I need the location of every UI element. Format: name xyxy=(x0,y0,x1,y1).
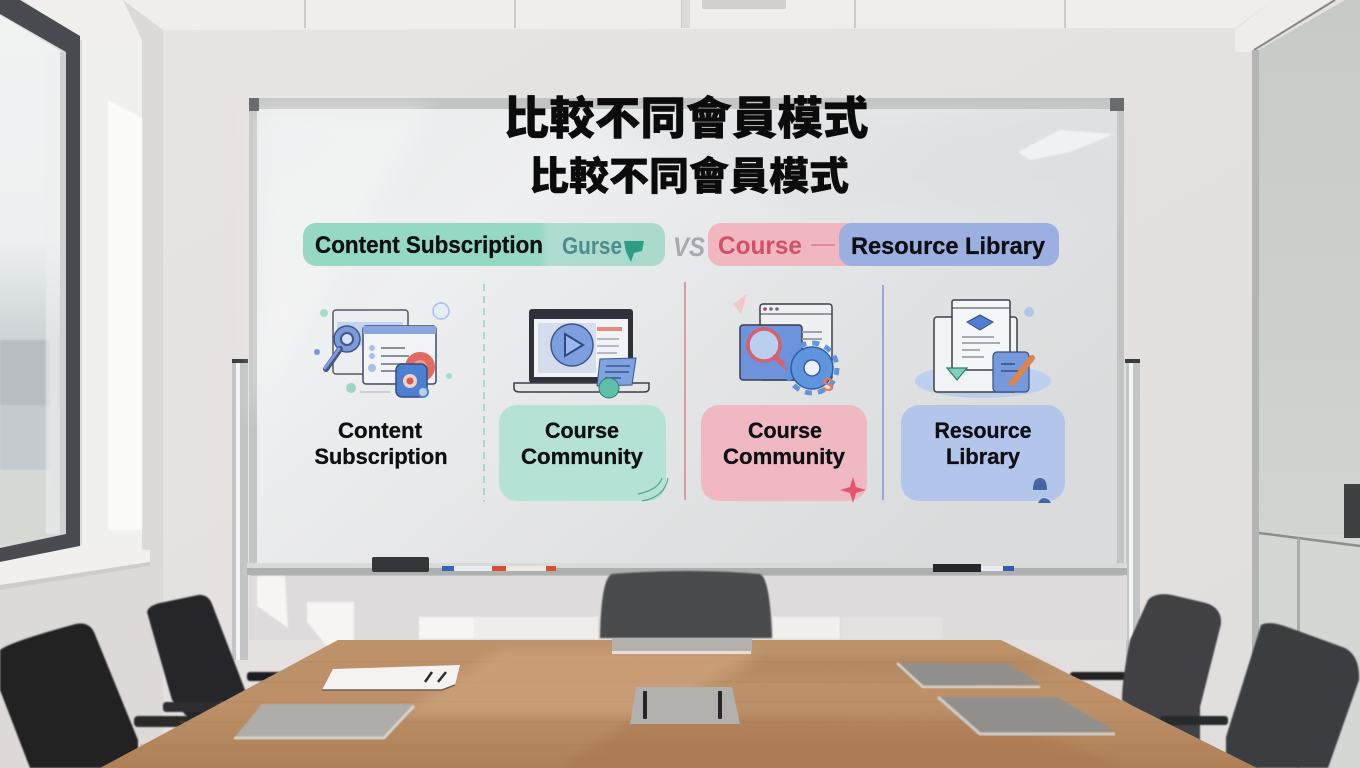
icon: green play tag xyxy=(624,241,644,262)
header bar: mint pill xyxy=(303,223,665,266)
icon: small blue cluster xyxy=(1033,478,1051,503)
card: resource library: Resource xyxy=(934,418,1032,443)
ceiling xyxy=(123,0,1273,30)
whiteboard frame and surface xyxy=(247,98,1127,576)
chair: left rear xyxy=(147,595,301,720)
header label: content subscription: Content Subscription xyxy=(315,232,543,259)
icon: documents and pen xyxy=(915,300,1051,398)
icon: magnifier and gear: S xyxy=(822,375,834,395)
icon: browser windows with magnifier xyxy=(314,303,452,397)
panel: content subscription xyxy=(314,303,452,469)
icon: sparkle xyxy=(840,477,866,503)
panel: course community mint xyxy=(499,309,668,501)
card: resource library xyxy=(901,405,1065,503)
laptop: left front xyxy=(234,704,414,738)
tablet with pens center xyxy=(630,687,740,724)
card: course community pink xyxy=(701,405,867,503)
chair: right front xyxy=(1160,623,1359,768)
chair: back center xyxy=(600,571,772,638)
right wall and glass partition xyxy=(1235,0,1360,768)
header label: faded course: Gurse xyxy=(562,233,622,260)
subtitle: 比較不同會員模式 xyxy=(529,156,849,199)
icon: laptop with play button xyxy=(514,309,649,398)
panel: resource library xyxy=(901,300,1065,503)
label: content subscription: Content xyxy=(338,418,422,443)
laptop: center back xyxy=(612,638,752,654)
icon: magnifier and gear xyxy=(733,294,837,395)
divider blue xyxy=(882,285,884,500)
card: course community mint xyxy=(499,405,668,501)
laptop: right front xyxy=(938,697,1115,734)
card: course community mint: Course xyxy=(545,418,619,443)
card: course community pink: Community xyxy=(723,444,845,469)
divider pink xyxy=(684,282,686,500)
main title: 比較不同會員模式 xyxy=(504,93,868,144)
left wall and window xyxy=(0,0,163,768)
vs mark: VS xyxy=(673,232,705,262)
header label: resource library: Resource Library xyxy=(851,233,1046,260)
header bar: blue pill xyxy=(839,223,1059,266)
sunlight patches under board xyxy=(257,576,942,650)
card: course community pink: Course xyxy=(748,418,822,443)
title block xyxy=(504,93,868,199)
label: content subscription xyxy=(314,418,448,469)
label: content subscription: Subscription xyxy=(314,444,448,469)
table xyxy=(100,640,1257,768)
header label: course: Course xyxy=(718,232,802,260)
card: course community mint: Community xyxy=(521,444,643,469)
card: resource library: Library xyxy=(946,444,1020,469)
wall shading under board xyxy=(249,576,1127,640)
panel: course community pink xyxy=(701,294,867,503)
header bar: pink pill xyxy=(708,223,868,266)
chair: left front xyxy=(0,624,202,768)
whiteboard stands xyxy=(232,359,1140,660)
chair: right rear xyxy=(1070,594,1221,740)
dashed divider mint xyxy=(483,284,485,502)
papers with pen xyxy=(322,665,460,690)
laptop: right back xyxy=(897,663,1040,687)
